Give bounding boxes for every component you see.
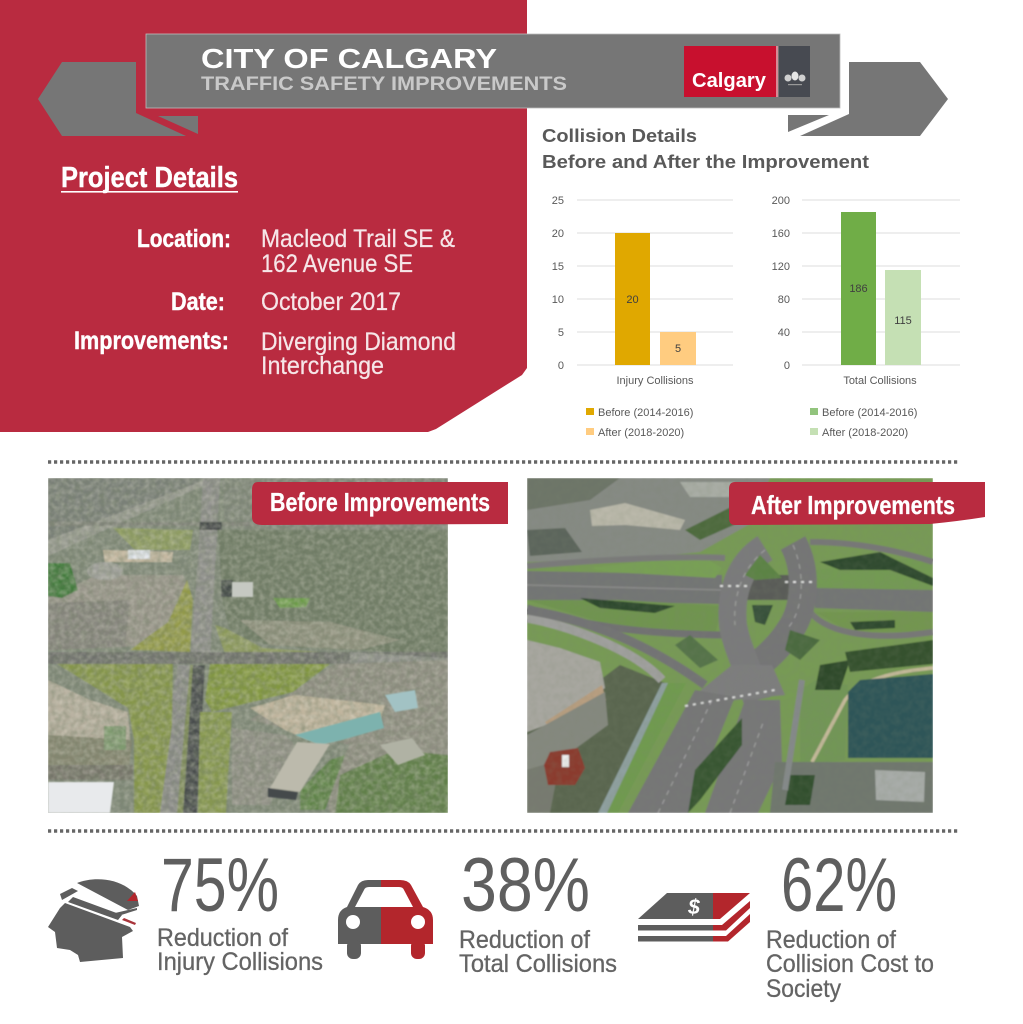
text block: project details: Location: (137, 225, 231, 253)
bar chart: total collisions: 120 (772, 261, 790, 273)
text block: project details: Improvements: (74, 327, 229, 355)
bar chart: total collisions: Total Collisions (843, 375, 917, 387)
heading: collision details: Collision Details (542, 126, 697, 146)
legend: injury collisions: Before (2014-2016) (598, 407, 693, 419)
diagonal roads (48, 480, 212, 556)
stat: total collisions (338, 858, 616, 972)
heading: project details: Project Details (61, 162, 238, 194)
right residential (218, 530, 448, 654)
photo: before improvements aerial (48, 478, 448, 813)
label (459, 926, 617, 978)
retaining wall and road (527, 618, 662, 680)
label (766, 926, 934, 1003)
stat: injury collisions (48, 843, 323, 976)
legend: total collisions (810, 407, 917, 439)
crosswalk markings (685, 582, 812, 706)
bar chart: injury collisions (552, 195, 733, 387)
label: Reduction of (157, 924, 288, 952)
photo: after improvements rendering (527, 478, 933, 813)
south approaches (598, 682, 668, 813)
subtitle: TRAFFIC SAFETY IMPROVEMENTS (201, 73, 567, 95)
legend: injury collisions: After (2018-2020) (598, 427, 684, 439)
bar chart: injury collisions: 20 (552, 228, 564, 240)
bar chart: injury collisions: 0 (558, 360, 564, 372)
text block: project details (74, 225, 456, 380)
label: before improvements: Before Improvements (270, 487, 490, 517)
legend: total collisions: After (2018-2020) (822, 427, 908, 439)
heading: collision details (542, 126, 869, 172)
text block: project details: Interchange (261, 352, 384, 380)
DDI carriageways (754, 536, 818, 670)
text block: project details: Diverging Diamond (261, 328, 456, 356)
right side (800, 680, 848, 765)
bar chart: injury collisions: 15 (552, 261, 564, 273)
stat: collision cost (638, 843, 934, 1003)
heading: collision details: Before and After the Improvement (542, 152, 869, 172)
right ribbon arrow (788, 62, 948, 136)
mall area (48, 575, 190, 650)
text block: project details: October 2017 (261, 288, 401, 316)
label: Injury Collisions (157, 948, 323, 976)
title: CITY OF CALGARY (201, 43, 497, 74)
label: after improvements: After Improvements (751, 490, 955, 520)
bar chart: total collisions: 160 (772, 228, 790, 240)
bar chart: total collisions: 80 (778, 294, 790, 306)
left ribbon arrow (38, 62, 198, 136)
lower left mall and trees (527, 650, 665, 813)
highway (527, 571, 722, 604)
bar chart: total collisions: 200 (772, 195, 790, 207)
bar chart: injury collisions: 5 (558, 327, 564, 339)
inner green (745, 555, 782, 580)
text block: project details: Macleod Trail SE & (261, 225, 455, 253)
text block: project details: Date: (171, 288, 225, 316)
bar chart: total collisions: 40 (778, 327, 790, 339)
text block: project details: 162 Avenue SE (261, 250, 413, 278)
lower right complex (250, 660, 448, 813)
legend: injury collisions (586, 407, 693, 439)
panel: project details background (0, 0, 527, 432)
bar chart: injury collisions: 5 (675, 343, 681, 355)
icon: bandaged head (48, 879, 139, 962)
logo: Calgary (684, 46, 810, 97)
green medians (632, 572, 717, 578)
red roof (544, 748, 585, 785)
bar chart: injury collisions: 25 (552, 195, 564, 207)
label: Reduction of (766, 926, 896, 954)
bar chart: total collisions: 0 (784, 360, 790, 372)
bar chart: injury collisions: 20 (626, 294, 639, 306)
logo: Calgary: Calgary (692, 70, 767, 92)
bar chart: total collisions (772, 195, 960, 387)
legend: total collisions: Before (2014-2016) (822, 407, 917, 419)
icon: money stack: $ (687, 896, 700, 919)
lane lines (658, 545, 801, 813)
bar chart: total collisions: 115 (894, 315, 912, 327)
bar chart: total collisions: 186 (849, 283, 868, 295)
center field (205, 664, 330, 712)
label: Total Collisions (459, 950, 617, 978)
label: before improvements (252, 482, 508, 525)
white building (48, 782, 114, 813)
label (157, 924, 323, 976)
value: 38% (461, 843, 590, 928)
header banner (38, 34, 948, 136)
upper left development (527, 478, 770, 562)
value: 62% (781, 843, 897, 928)
bar chart: injury collisions: 10 (552, 294, 564, 306)
icon: car (338, 880, 433, 959)
peripheral ramps (527, 608, 725, 635)
banner bar (146, 34, 840, 108)
icon: money stack (638, 893, 750, 942)
main road (190, 478, 220, 660)
cross road (48, 652, 448, 664)
lower left field (57, 664, 173, 813)
label: Collision Cost to (766, 950, 934, 978)
label: Reduction of (459, 926, 590, 954)
value: 75% (161, 843, 279, 928)
label: Society (766, 975, 841, 1003)
bar chart: injury collisions: Injury Collisions (616, 375, 694, 387)
label: after improvements (729, 482, 985, 525)
